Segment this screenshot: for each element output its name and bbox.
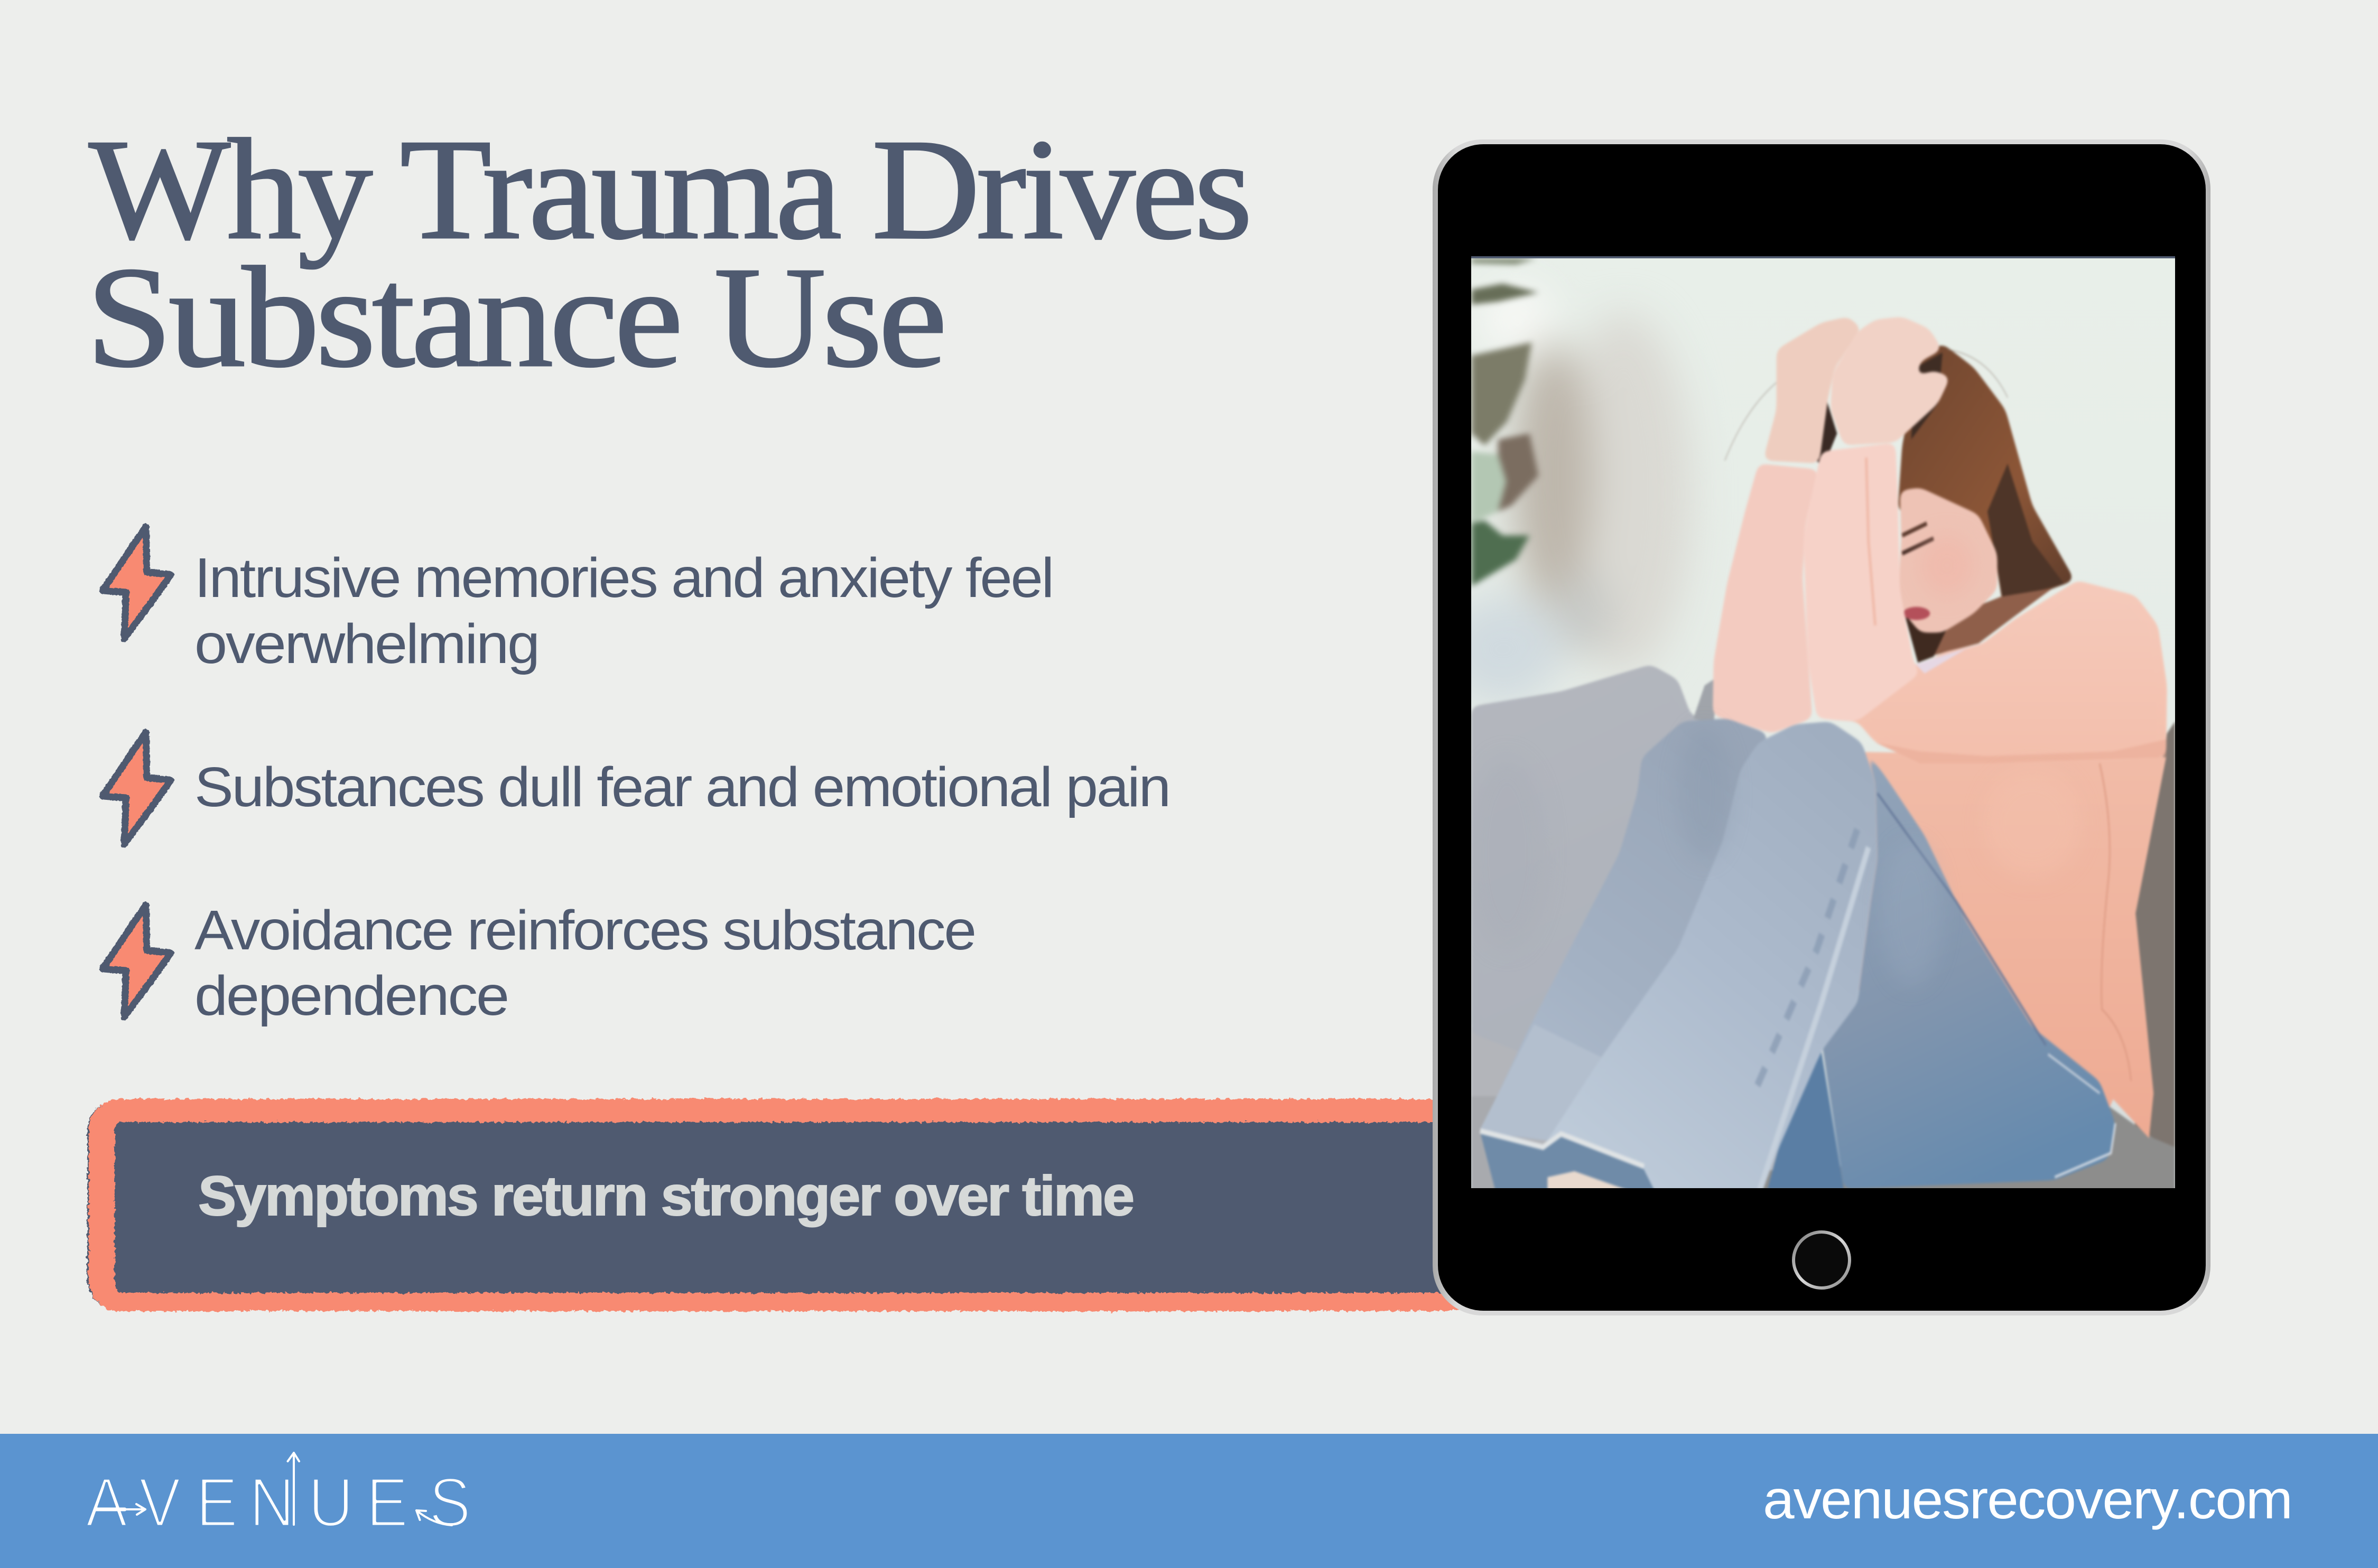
title: Why Trauma Drives [89,110,1249,269]
neck [1934,588,2052,656]
icon: lightning bolt 1 [103,527,171,639]
title [86,110,1249,397]
callout: symptoms return stronger over time: Symptoms return stronger over time [198,1165,1133,1227]
footer band [0,1434,2378,1568]
screen top edge line [1471,256,2175,258]
text: bullet 2: Substances dull fear and emotional pain [194,756,1169,818]
title: Substance Use [86,238,944,397]
sweater body [1831,751,2166,1153]
home button [1794,1232,1850,1288]
sleeves [1713,463,1819,733]
website url: avenuesrecovery.com [1763,1469,2292,1530]
icon: lightning bolt 3 [103,905,171,1017]
arm [1817,581,2167,763]
tablet device [1433,139,2210,1315]
text: bullet 1 [194,547,1053,675]
face [1898,488,1998,632]
logo arrows [96,1453,452,1525]
text: bullet 3: dependence [194,965,508,1027]
hands [1763,316,1862,463]
text: bullet 1: Intrusive memories and anxiety feel [194,547,1053,609]
photo: distressed woman sitting on a sofa [1444,258,2175,1201]
callout: symptoms return stronger over time [87,1099,1489,1311]
icon: lightning bolt 2 [103,732,171,844]
text: bullet 3 [194,899,975,1027]
logo: AVENUES: AVENUES [86,1463,471,1541]
text: bullet 3: Avoidance reinforces substance [194,899,975,962]
soft shading on clothes [1467,536,2082,985]
text: bullet 1: overwhelming [194,613,538,675]
bullet list [103,527,1169,1027]
sofa [1471,1027,1795,1201]
hair [1809,397,1837,466]
jeans [1768,1051,1844,1189]
